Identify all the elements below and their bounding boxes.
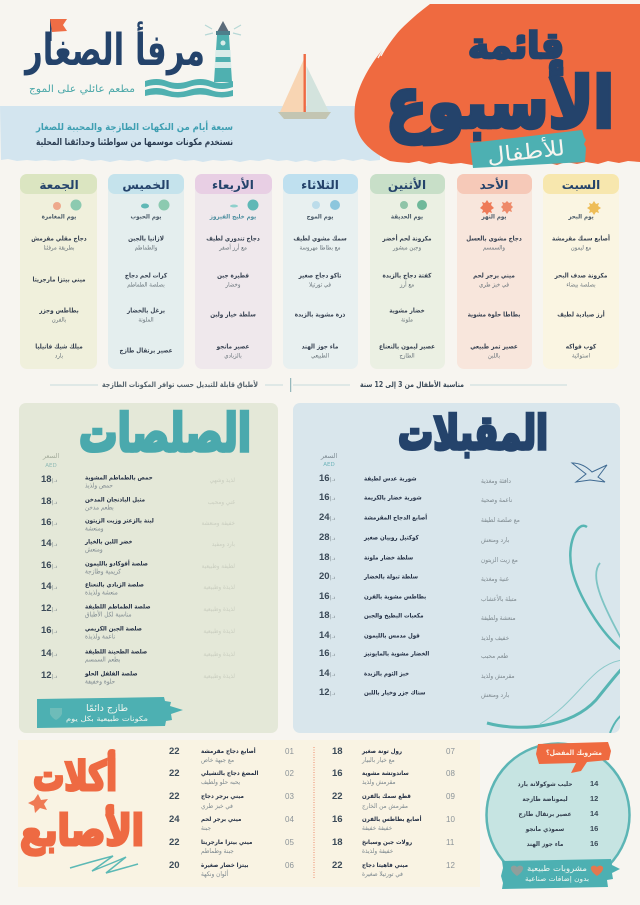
sauces rows: د.إ	[52, 652, 57, 658]
panel: Sunday: ميني برجر لحم	[473, 272, 515, 280]
sauces rows: حمص ولذيذ	[85, 482, 113, 490]
panel: Tuesday	[283, 174, 358, 369]
sauces rows: حمص بالطماطم المشوية	[85, 474, 153, 482]
sauces rows: خفيفة ومنعشة	[202, 520, 236, 527]
title line 1: قائمة	[468, 26, 564, 67]
panel: Wednesday: دجاج تندوري لطيف	[206, 236, 260, 242]
sauces rows: غني ومحبب	[208, 499, 235, 506]
appetizers rows: 16	[319, 473, 330, 484]
panel: Sunday: يوم النهر	[480, 214, 507, 220]
panel: Thursday: والطماطم	[135, 244, 158, 252]
finger food column 1: 22	[169, 746, 180, 757]
panel: Tuesday: ذرة مشوية بالزبدة	[295, 312, 345, 318]
appetizers rows: مكعبات البطيخ والجبن	[364, 612, 423, 620]
sauces rows: 16	[41, 517, 52, 528]
appetizers rows: د.إ	[330, 536, 335, 542]
appetizers rows: بطاطس مشوية بالفرن	[364, 594, 426, 600]
sauces rows: 14	[41, 538, 52, 549]
sauces rows: د.إ	[52, 629, 57, 635]
speech tag: مشروبك المفضل؟	[546, 749, 602, 757]
finger food column 1: 24	[169, 814, 180, 825]
panel: Wednesday: وخضار	[225, 282, 241, 288]
panel: Monday: وجبن مبشور	[392, 244, 421, 252]
banner: always fresh: طازج دائمًا	[86, 703, 128, 714]
price header	[42, 452, 59, 469]
sauces rows: صلصة الزبادي بالنعناع	[85, 582, 144, 588]
price header: AED	[323, 462, 335, 468]
drinks rows: سموذي مانجو	[525, 826, 565, 833]
appetizers rows: د.إ	[330, 614, 335, 620]
sauces rows: د.إ	[52, 607, 57, 613]
panel: Saturday	[543, 174, 619, 369]
appetizers rows: د.إ	[330, 516, 335, 522]
panel: Monday: كفتة دجاج بالزبدة	[383, 272, 432, 280]
drinks rows: 16	[590, 824, 598, 833]
dotted divider	[313, 747, 315, 878]
finger food column 1: 02	[285, 769, 294, 778]
banner: natural drinks: مشروبات طبيعية	[527, 864, 587, 873]
finger food column 2: 10	[446, 815, 455, 824]
panel: Friday: يوم المغامرة	[42, 214, 76, 220]
sauces rows: 14	[41, 581, 52, 592]
sauces rows: بارد ومفيد	[212, 541, 235, 548]
appetizers rows: مع زيت الزيتون	[481, 556, 518, 564]
panel: Sunday	[457, 174, 532, 369]
panel: Monday: الأثنين	[388, 177, 426, 192]
sauces rows: منعشة ولذيذة	[85, 588, 118, 596]
title block: orange brush shape	[355, 4, 640, 165]
panel: Monday: يوم الحديقة	[391, 214, 423, 220]
finger food column 2: مقرمش من الخارج	[362, 802, 408, 810]
panel: Friday: الجمعة	[39, 178, 79, 192]
finger food column 2: 07	[446, 747, 455, 756]
panel: Thursday: الملونة	[138, 316, 154, 324]
finger food column 1: 01	[285, 747, 294, 756]
appetizers rows: 20	[319, 571, 330, 582]
drinks rows: ماء جوز الهند	[527, 841, 564, 848]
finger food column 2: خفيفة ولذيذة	[362, 847, 394, 855]
finger food column 1: المضغ دجاج بالتشيلي	[201, 770, 258, 777]
panel: Saturday: أرز صيادية لطيف	[557, 310, 605, 318]
banner: natural drinks: بدون إضافات صناعية	[525, 875, 589, 883]
sauces rows: بطعم مدخن	[85, 504, 114, 512]
panel: Tuesday: يوم الموج	[307, 214, 333, 220]
sauces rows: مناسبة لكل الأطباق	[85, 610, 132, 618]
panel: Saturday: استوائية	[572, 352, 590, 360]
price header: السعر	[42, 452, 59, 460]
finger food column 1: 04	[285, 815, 294, 824]
panel: Friday: بارد	[55, 352, 64, 360]
appetizers rows: د.إ	[330, 691, 335, 697]
panel: Saturday: مكرونة صدف البحر	[554, 272, 608, 280]
panel: Tuesday: الطبيعي	[311, 352, 329, 360]
sauces rows: ناعمة ولذيذة	[85, 632, 116, 640]
finger food column 1: 20	[169, 860, 180, 871]
appetizers rows: أصابع الدجاج المقرمشة	[364, 514, 427, 522]
finger food column 2: مقرمش ولذيذ	[362, 778, 396, 786]
appetizers rows: سلطة تبولة بالخضار	[363, 574, 418, 580]
finger food column 1: في خبز طري	[201, 802, 233, 810]
sauces rows: 18	[41, 474, 52, 485]
sauces rows: متبل الباذنجان المدخن	[85, 496, 145, 504]
sauces rows: د.إ	[52, 478, 57, 484]
panel: Thursday: بصلصة الطماطم	[127, 282, 165, 288]
finger food column 2: رول تونة صغير	[361, 748, 402, 755]
drinks rows: 14	[590, 809, 599, 818]
icon: logo flag	[50, 19, 67, 41]
finger food column 1	[169, 746, 294, 878]
panel: Thursday: برغل بالخضار	[126, 308, 165, 314]
finger food column 2: 16	[332, 768, 343, 779]
panel: Saturday: كوب فواكه	[566, 344, 597, 350]
panel: Friday	[20, 174, 97, 369]
panel: Wednesday	[195, 174, 272, 369]
sauces rows: كريمية وطازجة	[85, 568, 121, 576]
panel: Tuesday: مع بطاطا مهروسة	[299, 244, 341, 252]
appetizers rows	[319, 473, 520, 699]
banner: natural drinks	[501, 859, 620, 889]
logo: lighthouse and waves	[145, 21, 241, 98]
panel: Friday: بطريقة مرفئنا	[43, 244, 75, 252]
finger food column 2: 18	[332, 746, 343, 757]
appetizers rows: بارد ومنعش	[481, 536, 510, 544]
intro text: نستخدم مكونات موسمها من سواطئنا وحدائقنا المحلية	[36, 137, 233, 148]
finger food column 1: بيتزا خضار صغيرة	[201, 862, 248, 869]
finger food column 1: 22	[169, 837, 180, 848]
panel: Thursday: الخميس	[122, 178, 170, 192]
panel: Sunday: في خبز طري	[479, 282, 509, 288]
panel: drinks circle	[486, 742, 630, 889]
sauces rows: د.إ	[52, 542, 57, 548]
panel: Monday: مكرونة لحم أخضر	[381, 234, 432, 242]
sauces rows: ومنعشة	[85, 524, 104, 532]
sauces rows: لذيذة وطبيعية	[203, 606, 235, 613]
drinks rows: 16	[590, 839, 598, 848]
panel: Thursday: كرات لحم دجاج	[125, 272, 168, 280]
panel: Saturday: السبت	[562, 178, 600, 192]
sauces rows: صلصة الطحينة اللطيفة	[85, 648, 147, 656]
intro text	[35, 120, 233, 148]
price header	[320, 452, 337, 468]
panel: sauces	[19, 403, 278, 733]
panel: Tuesday: تاكو دجاج صغير	[298, 272, 341, 280]
finger food column 2: في تورتيلا صغيرة	[362, 870, 403, 878]
finger food column 2: رولات جبن وسبانخ	[362, 839, 412, 846]
note: availability: لأطباق قابلة للتبديل حسب توافر المكونات الطازجة	[102, 380, 258, 389]
finger food column 2: 22	[332, 860, 343, 871]
finger food column 1: 06	[285, 861, 294, 870]
sauces rows: د.إ	[52, 585, 57, 591]
appetizers rows: د.إ	[330, 477, 335, 483]
panel: Friday: ميلك شيك فانيليا	[35, 344, 83, 350]
sauces rows: حلوة وخفيفة	[85, 678, 116, 686]
sauces rows: 16	[41, 625, 52, 636]
finger food heading: أكلات	[33, 750, 117, 800]
finger food column 1: ميني بيتزا مارجريتا	[201, 839, 252, 846]
finger food column 1: 05	[285, 838, 294, 847]
appetizers rows: فول مدمس بالليمون	[364, 632, 420, 640]
appetizers rows: 14	[319, 630, 330, 641]
panel: Monday	[370, 174, 445, 369]
finger food column 2: قطع سمك بالفرن	[362, 793, 411, 800]
panel: Wednesday: عصير مانجو	[216, 344, 249, 350]
decoration: teal swirls	[487, 526, 630, 733]
panel: Saturday: بصلصة بيضاء	[566, 282, 596, 288]
sauces rows: بطعم السمسم	[85, 656, 121, 664]
finger food column 2: ساندوتشة مشوية	[362, 770, 409, 777]
panel: Sunday: باللبن	[488, 352, 501, 360]
drinks rows: عصير برتقال طازج	[519, 811, 572, 818]
panel: Sunday: بطاطا حلوة مشوية	[468, 312, 520, 318]
panel: Monday: عصير ليمون بالنعناع	[379, 344, 435, 350]
drinks rows: ليموناضة طازجة	[522, 796, 568, 803]
panel: Wednesday: يوم خليج الفيروز	[209, 214, 256, 220]
panel: Monday: الطازج	[399, 352, 415, 360]
finger food column 1: 22	[169, 768, 180, 779]
appetizers rows: د.إ	[330, 652, 335, 658]
appetizers rows: د.إ	[330, 672, 335, 678]
sauces rows: لطيفة وطبيعية	[202, 563, 235, 570]
appetizers rows: دافئة ومغذية	[481, 477, 511, 485]
price header: السعر	[320, 452, 337, 460]
sauces rows	[41, 474, 236, 686]
appetizers rows: ناعمة وصحية	[481, 496, 513, 504]
finger food column 2: خفيفة خفيفة	[362, 824, 393, 832]
drinks rows: 12	[590, 794, 598, 803]
panel: Sunday: الأحد	[480, 177, 508, 192]
logo name: مرفأ الصغار	[24, 21, 205, 76]
panel: Thursday: لازانيا بالجبن	[128, 236, 164, 242]
note: ages: مناسبة الأطفال من 3 إلى 12 سنة	[360, 380, 464, 389]
finger food column 1: 22	[169, 791, 180, 802]
panel: Wednesday: مع أرز أصفر	[218, 244, 247, 252]
finger food column 1: جبنة وطماطم	[201, 847, 234, 855]
icon: teal zigzag	[70, 856, 138, 873]
finger food column 2: 09	[446, 792, 455, 801]
appetizers rows: 12	[319, 687, 330, 698]
sauces rows: 14	[41, 648, 52, 659]
sauces rows: 16	[41, 560, 52, 571]
sauces rows: لذيذة وطبيعية	[203, 651, 235, 658]
appetizers rows: الخضار مشوية بالمايونيز	[363, 650, 429, 658]
finger food column 2: 12	[446, 861, 455, 870]
banner: always fresh	[37, 697, 183, 728]
sauces rows: 12	[41, 670, 52, 681]
finger food column 1: ميني برجر لحم	[201, 816, 241, 823]
appetizers rows: د.إ	[330, 496, 335, 502]
panel: Sunday: والسمسم	[483, 244, 505, 252]
drinks rows: حليب شوكولاتة بارد	[518, 781, 572, 788]
sauces rows: لذيذة وطبيعية	[203, 673, 235, 680]
panel: Tuesday: سمك مشوي لطيف	[293, 236, 347, 242]
sauces rows: لذيذ وشهي	[210, 477, 235, 484]
drinks rows	[518, 779, 599, 848]
panel: Tuesday: ماء جوز الهند	[302, 344, 339, 350]
panel: Thursday: يوم الحبوب	[131, 214, 161, 220]
panel: Sunday: دجاج مشوي بالعسل	[466, 236, 522, 242]
header band	[0, 106, 380, 162]
finger food heading	[20, 750, 144, 856]
panel: finger food background	[18, 740, 480, 887]
finger food heading: الأصابع	[20, 805, 144, 856]
panel: Saturday: أصابع سمك مقرمشة	[552, 234, 610, 242]
appetizers rows: مقرمش ولذيذ	[481, 672, 515, 680]
finger food column 2: 11	[446, 838, 455, 847]
panel: Wednesday: فطيرة جبن	[217, 272, 249, 280]
appetizers rows: شوربة عدس لطيفة	[364, 476, 417, 482]
drinks rows: 14	[590, 779, 599, 788]
panel: Thursday	[108, 174, 184, 369]
appetizers rows: 16	[319, 492, 330, 503]
finger food column 1: يحبه حلو ولطيف	[201, 778, 241, 786]
sauces rows: د.إ	[52, 674, 57, 680]
appetizers rows: د.إ	[330, 634, 335, 640]
finger food column 2: 16	[332, 814, 343, 825]
appetizers rows: خفيف ولذيذ	[481, 634, 510, 642]
seagull icon	[572, 463, 607, 482]
appetizers rows: شوربة خضار بالكريمة	[364, 494, 422, 502]
appetizers rows: د.إ	[330, 595, 335, 601]
sauces rows: صلصة أفوكادو بالليمون	[85, 560, 148, 568]
panel: Friday: بطاطس وجزر	[38, 308, 79, 314]
panel: Monday: خضار مشوية	[389, 308, 425, 314]
appetizers rows: غنية ومغذية	[481, 575, 509, 583]
price header: AED	[45, 463, 57, 469]
appetizers rows: سلطة خضار ملونة	[364, 554, 413, 562]
finger food column 1: ألوان ونكهة	[201, 869, 229, 878]
sauces rows: صلصة الطماطم اللطيفة	[85, 604, 151, 610]
panel: Monday: ملونة	[401, 316, 413, 324]
appetizers rows: 18	[319, 610, 330, 621]
appetizers rows: متبلة بالأعشاب	[481, 594, 517, 603]
sauces heading: الصلصات	[79, 404, 251, 464]
sauces rows: 18	[41, 496, 52, 507]
icon: sailboat	[278, 54, 331, 119]
appetizers rows: 16	[319, 648, 330, 659]
icon: starfish	[28, 794, 48, 813]
sauces rows: د.إ	[52, 521, 57, 527]
banner: always fresh: مكونات طبيعية بكل يوم	[66, 715, 148, 723]
appetizers rows: 14	[319, 668, 330, 679]
panel: Tuesday: في تورتيلا	[309, 282, 331, 288]
finger food column 2: 22	[332, 791, 343, 802]
panel: Wednesday: سلطة خيار ولبن	[210, 312, 256, 318]
finger food column 1: 03	[285, 792, 294, 801]
finger food column 1: أصابع دجاج مقرمشة	[201, 747, 256, 755]
note divider	[50, 378, 567, 392]
sauces rows: صلصة الفلفل الحلو	[84, 670, 138, 678]
panel: appetizers	[293, 403, 630, 733]
appetizers rows: خبز الثوم بالزبدة	[364, 670, 409, 678]
finger food column 2: 08	[446, 769, 455, 778]
sauces rows: لذيذة وطبيعية	[203, 584, 235, 591]
appetizers heading: المقبلات	[398, 406, 548, 461]
sauces rows: ومنعش	[85, 546, 103, 554]
intro text: سبعة أيام من النكهات الطازجة والمحببة للصغار	[35, 120, 233, 133]
panel: Friday: دجاج مقلي مقرمش	[31, 236, 87, 242]
appetizers rows: سناك جزر وخيار باللبن	[364, 690, 425, 696]
panel: Wednesday: الأربعاء	[212, 177, 254, 192]
finger food column 2: مع خيار بالبيار	[361, 756, 395, 764]
appetizers rows: 18	[319, 552, 330, 563]
panel: Monday: مع أرز	[399, 280, 414, 288]
sauces rows: د.إ	[52, 564, 57, 570]
appetizers rows: 24	[319, 512, 330, 523]
panel: Sunday: عصير تمر طبيعي	[470, 344, 518, 350]
sauces rows: لذيذة وطبيعية	[203, 628, 235, 635]
appetizers rows: طعم محبب	[481, 652, 509, 660]
sauces rows: د.إ	[52, 500, 57, 506]
appetizers rows: كوكتيل روبيان صغير	[363, 534, 419, 542]
sauces rows: صلصة الجبن الكريمي	[85, 626, 142, 632]
speech tag	[536, 742, 611, 773]
finger food column 1: مع جبهة خاص	[201, 756, 234, 764]
badge: for kids: للأطفال	[486, 135, 566, 168]
appetizers rows: مع صلصة لطيفة	[481, 516, 520, 524]
sauces rows: خضر اللبن بالخيار	[84, 538, 133, 546]
finger food column 2: ميني فاهيتا دجاج	[362, 862, 408, 869]
panel: Saturday: يوم البحر	[567, 214, 594, 220]
appetizers rows: منعشة ولطيفة	[481, 614, 516, 622]
sauces rows: 12	[41, 603, 52, 614]
appetizers rows: د.إ	[330, 556, 335, 562]
panel: Friday: بالفرن	[52, 316, 67, 324]
finger food column 2: أصابع بطاطس بالفرن	[362, 815, 422, 823]
panel: Wednesday: بالزبادي	[224, 352, 242, 360]
panel: Saturday: مع ليمون	[571, 244, 591, 252]
finger food column 2: 18	[332, 837, 343, 848]
finger food column 1: جبنة	[201, 824, 212, 832]
finger food column 2	[332, 746, 455, 878]
panel: Tuesday: الثلاثاء	[301, 178, 339, 192]
finger food column 1: ميني برجر دجاج	[201, 793, 244, 800]
appetizers rows: 28	[319, 532, 330, 543]
appetizers rows: 16	[319, 591, 330, 602]
appetizers rows: بارد ومنعش	[481, 691, 510, 699]
badge: for kids	[470, 130, 586, 168]
appetizers rows: د.إ	[330, 575, 335, 581]
panel: Thursday: عصير برتقال طازج	[120, 348, 173, 354]
logo tagline: مطعم عائلي على الموج	[29, 84, 135, 95]
panel: Friday: ميني بيتزا مارجريتا	[32, 276, 86, 284]
sauces rows: لبنة بالزعتر وزيت الزيتون	[85, 518, 154, 524]
